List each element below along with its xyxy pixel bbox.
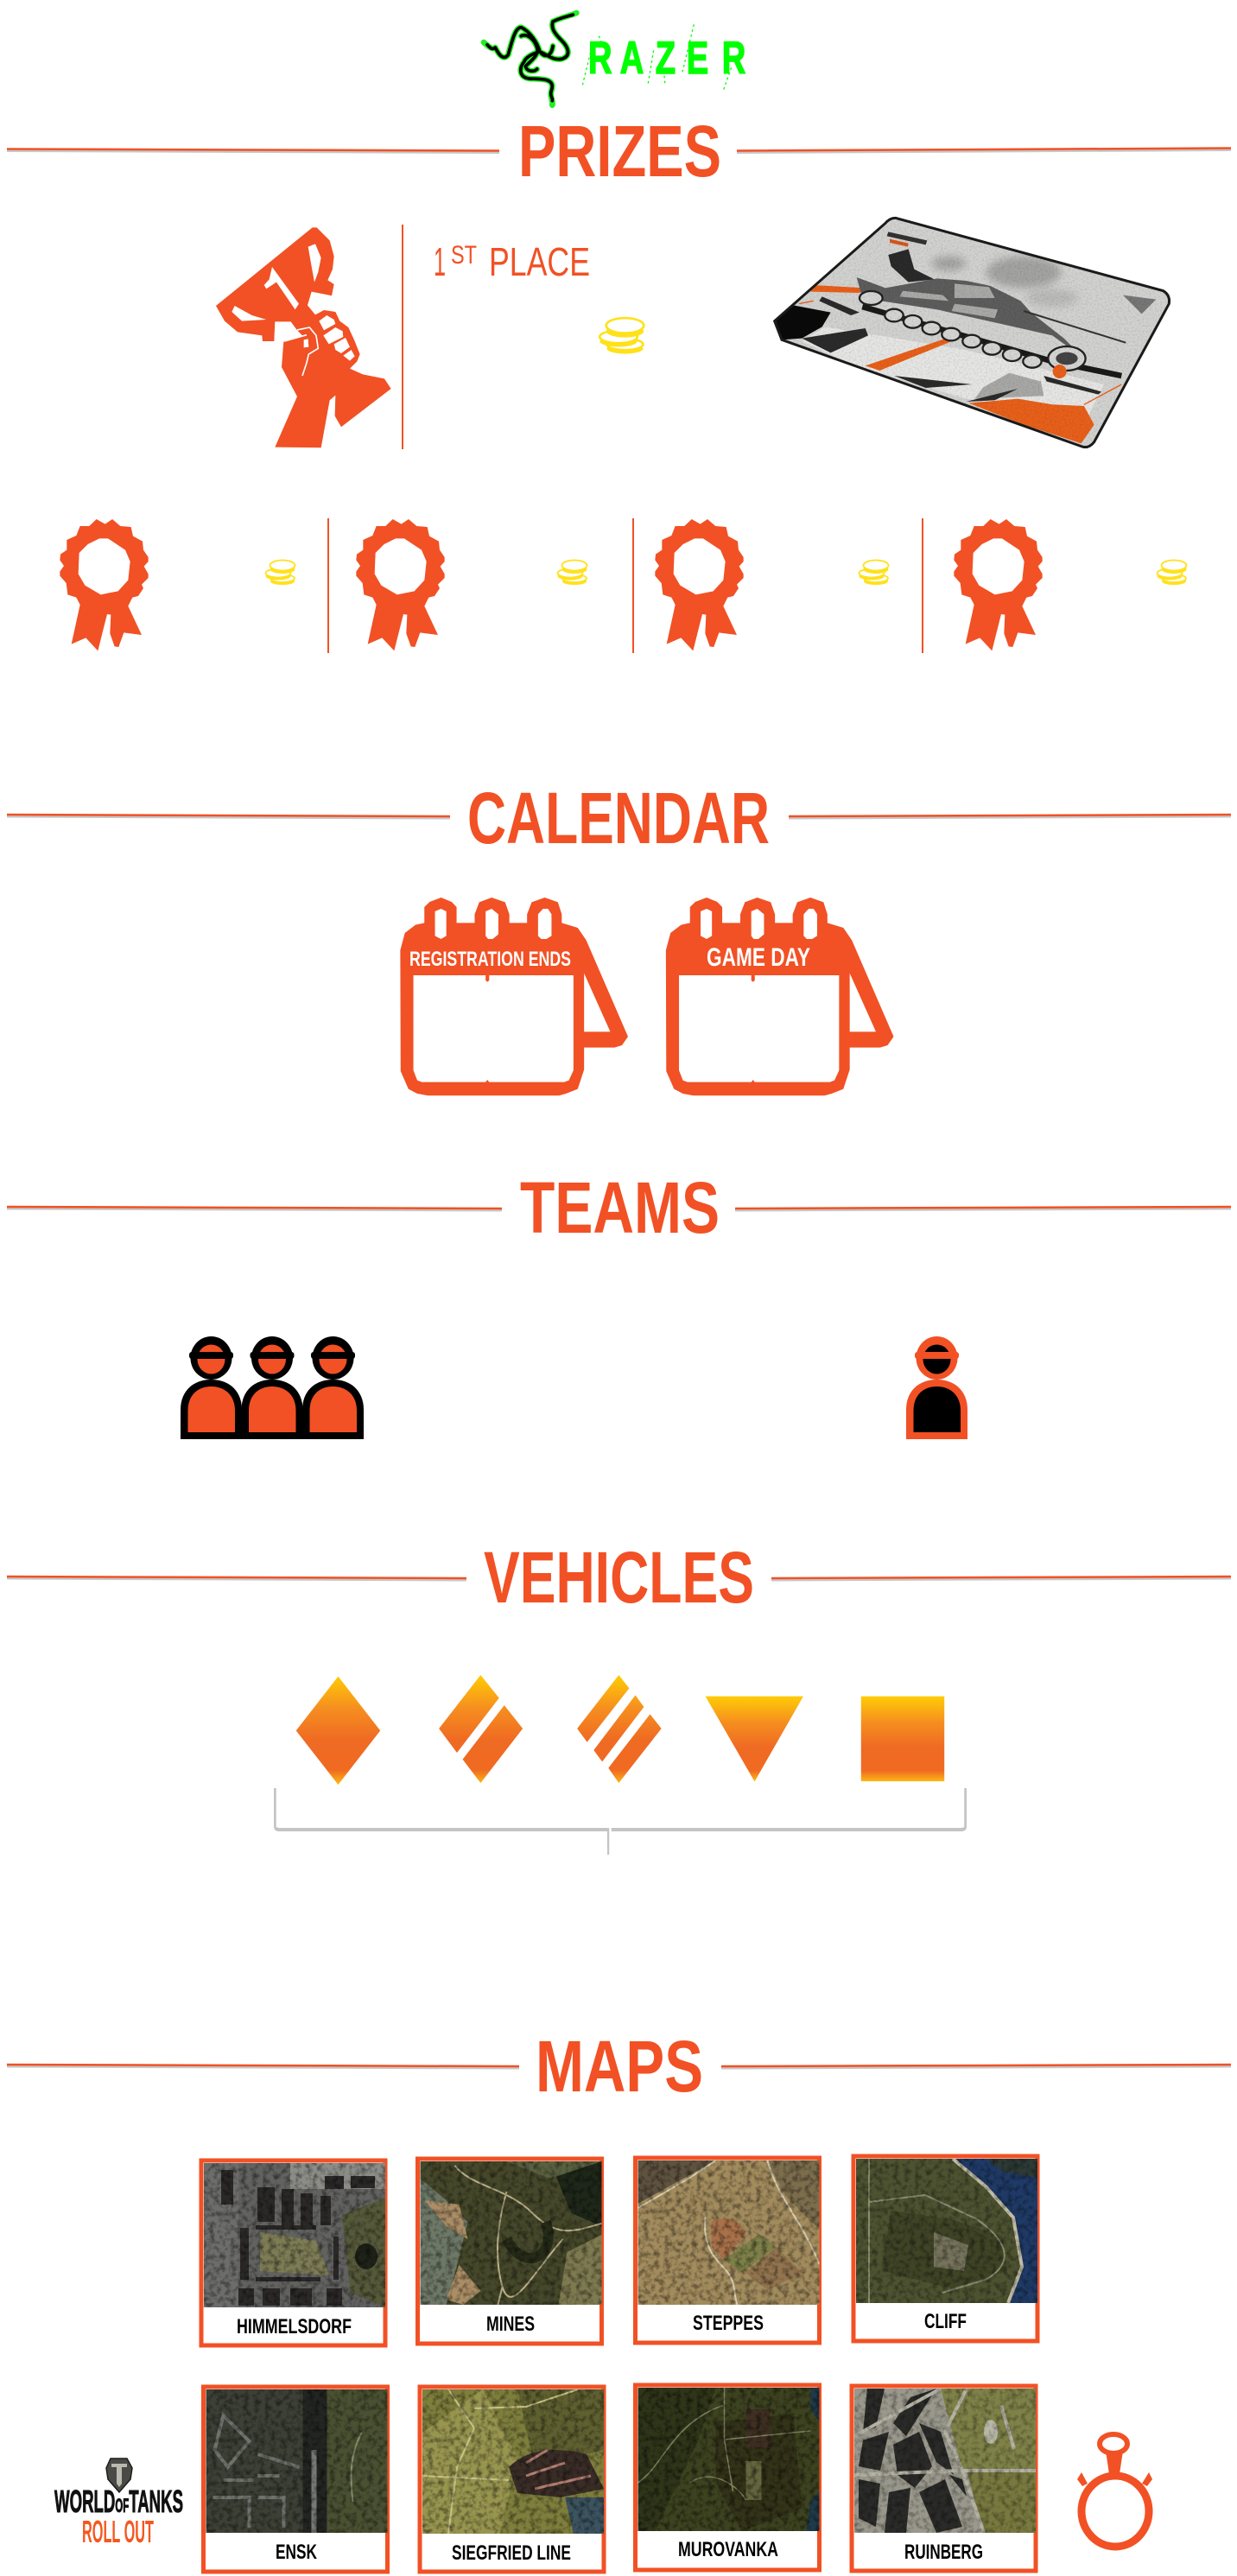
icon: trophy in hand xyxy=(216,227,391,447)
icon: calendar registration ends xyxy=(400,898,628,1095)
icon: tank destroyer xyxy=(706,1697,803,1781)
text: 1st place: ST xyxy=(451,241,477,270)
text: 1st place: 1 xyxy=(434,239,446,284)
icon: calendar game day xyxy=(666,898,893,1095)
coins 4th xyxy=(859,560,888,585)
icon: artillery xyxy=(861,1697,944,1781)
map card: Siegfried Line xyxy=(420,2387,604,2572)
icon: team of three xyxy=(181,1336,364,1439)
icon: single player xyxy=(906,1336,967,1439)
logo: World of Tanks Roll Out: ROLL OUT xyxy=(82,2514,154,2549)
map card: Mines xyxy=(418,2159,601,2344)
ribbon 2nd xyxy=(60,519,149,650)
text: 1st place xyxy=(434,239,590,284)
logo: Razer xyxy=(484,13,745,105)
heading: maps: MAPS xyxy=(536,2026,703,2107)
heading: prizes xyxy=(7,111,1231,192)
icon: coins xyxy=(599,318,644,354)
panel: first place xyxy=(216,212,1179,460)
logo: World of Tanks Roll Out: WORLDOFTANKS xyxy=(54,2484,183,2519)
panel: runner-up prizes xyxy=(60,518,1187,653)
icon: calendar registration ends: REGISTRATION ENDS xyxy=(409,948,571,971)
wordmark drips xyxy=(582,24,732,92)
text: 1st place: PLACE xyxy=(489,239,590,284)
map card: Steppes xyxy=(636,2158,819,2343)
heading: prizes: PRIZES xyxy=(518,111,721,192)
ribbon 3rd xyxy=(356,519,445,650)
logo: World of Tanks Roll Out xyxy=(54,2459,183,2549)
bracket xyxy=(276,1788,965,1855)
map card: Cliff xyxy=(853,2156,1037,2341)
map card: Ensk xyxy=(204,2387,387,2572)
map card: Himmelsdorf: HIMMELSDORF xyxy=(237,2315,352,2338)
map card: Siegfried Line: SIEGFRIED LINE xyxy=(452,2541,571,2565)
coins 2nd xyxy=(266,560,295,585)
icon: shield xyxy=(106,2459,132,2492)
icon: Razer snake xyxy=(484,13,576,105)
heading: calendar: CALENDAR xyxy=(467,777,770,859)
map card: Ruinberg xyxy=(852,2386,1036,2571)
map card: Murovanka xyxy=(636,2385,819,2570)
icon: calendar game day: GAME DAY xyxy=(707,943,810,972)
icon: stopwatch xyxy=(1077,2434,1152,2547)
ribbon 4th xyxy=(655,519,744,650)
coins 3rd xyxy=(558,560,587,585)
mousepad xyxy=(764,212,1179,460)
map card: Himmelsdorf xyxy=(201,2160,385,2345)
icon: heavy tank xyxy=(577,1675,662,1783)
map card: Steppes: STEPPES xyxy=(693,2312,764,2335)
heading: teams: TEAMS xyxy=(520,1167,720,1248)
icon: light tank xyxy=(296,1677,380,1785)
icon: medium tank xyxy=(439,1675,523,1783)
coins 5th xyxy=(1158,560,1187,585)
map card: Ensk: ENSK xyxy=(276,2541,317,2564)
ribbon 5th xyxy=(954,519,1043,650)
map card: Cliff: CLIFF xyxy=(924,2310,967,2333)
map card: Murovanka: MUROVANKA xyxy=(678,2538,778,2561)
divider xyxy=(402,225,403,449)
map card: Ruinberg: RUINBERG xyxy=(904,2541,983,2564)
vehicle classes xyxy=(296,1675,944,1785)
wordmark: RAZER xyxy=(588,32,745,83)
heading: vehicles: VEHICLES xyxy=(484,1537,754,1618)
map card: Mines: MINES xyxy=(486,2313,535,2336)
